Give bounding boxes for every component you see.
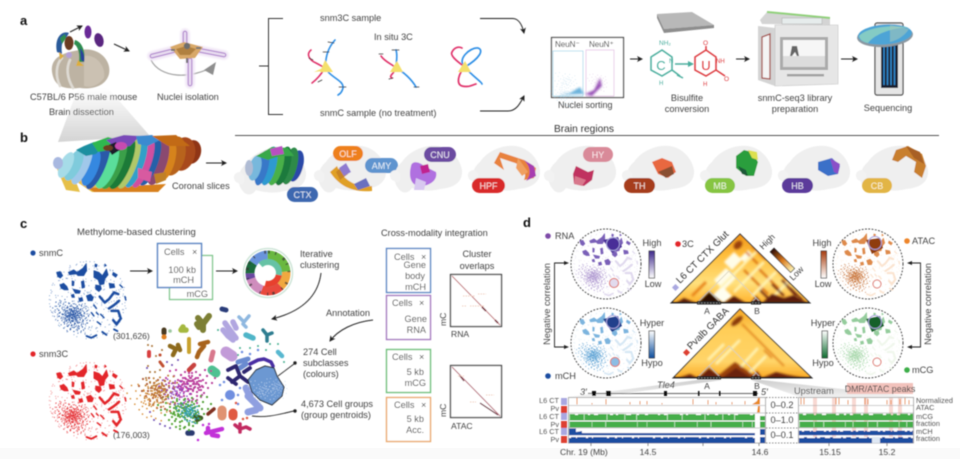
negative correlation left: Negative correlation [542,263,552,345]
arrow annotation [330,320,373,341]
label nuclei sorting: Nuclei sorting [558,100,613,110]
matrix gene body mCH: body [405,271,425,281]
region HY [544,146,616,192]
heatmap Pvalb GABA: B [754,381,760,391]
axis genomic coordinates: 14.6 [752,447,769,457]
axis genomic coordinates: 14.5 [640,447,657,457]
umap snmC [39,251,136,349]
label snm3C sample: snm3C sample [320,13,381,23]
label bisulfite conversion: Bisulfite [671,93,703,103]
count snm3C: (176,003) [113,430,150,440]
track labels: mCG [916,412,933,421]
region HB [778,146,850,193]
gene model Tle4: 3′ [580,387,587,397]
row labels: L6 CT [539,396,560,405]
label brain dissection: Brain dissection [49,107,114,117]
legend ATAC scale [813,238,832,289]
legend mCG scale: Hyper [811,318,835,328]
axis genomic coordinates: 15.15 [819,447,841,457]
diagram: cytosine to uracil: O [724,76,729,83]
matrix gene body mCH: Cells [394,252,415,262]
callout 274 subclasses [278,347,349,379]
row labels [539,396,560,444]
legend 3C: 3C [682,239,694,249]
region MB: MB [713,181,727,191]
matrix gene body mCH: mCH [405,282,426,292]
rule [235,135,939,136]
legend RNA scale: Low [645,279,662,289]
umap mCG [827,302,908,384]
range labels [766,398,798,443]
region HY: HY [592,150,604,160]
genome tracks right [798,398,914,443]
region OLF and AMY: OLF [339,149,357,159]
label iterative clustering: clustering [300,260,339,270]
label nuclei isolation: Nuclei isolation [157,92,219,102]
label library preparation: snmC-seq3 library [758,93,833,103]
label in situ 3C: In situ 3C [374,32,413,42]
callout 4,673 groups [252,399,373,420]
diagram: cytosine to uracil: C [656,58,666,73]
matrix mCG: 5 kb [407,367,424,377]
label brain dissection [30,92,137,117]
matrix gene RNA [386,296,430,340]
legend mCG: mCG [912,365,933,375]
gene model Tle4: Tle4 [657,380,675,390]
matrix stack mCH mCG: mCH [173,275,194,285]
diagram: contact one [309,40,346,95]
region MB [700,146,772,193]
umap snm3C [39,352,136,450]
icon: centrifuge rotor [151,33,224,84]
label coronal slices: Coronal slices [172,181,230,191]
legend RNA: RNA [555,231,575,241]
axis genomic coordinates [560,443,896,457]
image: coronal slices stack [53,134,204,192]
label brain dissection: C57BL/6 P56 male mouse [30,92,137,102]
matrix gene body mCH: Gene [404,260,426,270]
heading brain regions: Brain regions [554,124,614,135]
matrix gene RNA: Gene [405,314,427,324]
chart: coloured atlas umap [127,309,287,440]
panel letter d: d [523,215,531,230]
count snmC: (301,626) [113,331,150,341]
legend mCH scale [640,318,664,368]
label bisulfite conversion: conversion [665,104,709,114]
label bisulfite conversion [665,93,709,114]
legend mCH: mCH [555,371,576,381]
label upstream: Upstream [794,386,834,396]
matrix mCG [386,350,430,392]
panel c: clustering [20,216,502,450]
funnel from contact map to tracks [568,380,914,397]
matrix gene RNA: RNA [407,325,427,335]
legend mCH scale: Hyper [640,318,664,328]
negative correlation right [907,261,933,349]
arrow to regions [206,162,226,164]
matrix mCG: × [419,352,424,362]
matrix stack mCH mCG [158,244,212,300]
chart: clustering wheel [244,248,292,298]
arrow to library prep [736,58,749,60]
panel letter b: b [20,130,28,145]
region HB: HB [791,181,804,191]
range labels: 0–0.2 [770,400,794,410]
negative correlation right: Negative correlation [923,263,933,345]
umap mCH [565,302,646,384]
callout 274 subclasses: 274 Cell [303,347,337,357]
diagram: cytosine to uracil: U [701,58,711,73]
legend RNA scale: High [643,238,661,248]
arrow to bisulfite [630,58,642,60]
arrow bottom to sorting [480,96,524,111]
callout 274 subclasses: subclasses [303,358,349,368]
row labels: L6 CT [539,427,560,436]
label snmC sample: snmC sample (no treatment) [320,108,436,118]
label sequencing: Sequencing [864,103,912,113]
umap RNA [565,223,646,305]
diagram: cytosine to uracil: NH₂ [659,40,671,47]
legend mCH [545,371,576,381]
umap ATAC [827,223,908,305]
matrix accessibility [386,398,430,442]
legend mCG scale [811,318,835,368]
icon: plate [657,12,714,33]
gene model Tle4 [580,380,768,397]
chart: nuclei sorting [551,38,624,106]
diagram: cytosine to uracil: H [703,82,707,88]
legend ATAC: ATAC [912,236,936,246]
region OLF and AMY: AMY [372,161,391,171]
label cluster overlaps: overlaps [460,261,495,271]
heatmap L6 CT [670,229,812,316]
matrix accessibility: Acc. [406,425,424,435]
heatmap Pvalb GABA: A [704,381,710,391]
track labels [916,396,953,443]
panel letter a: a [20,13,28,28]
heatmap L6 CT: L6 CT CTX Glut [674,229,731,286]
chart: mC vs RNA overlap [438,274,502,339]
label annotation: Annotation [326,308,370,318]
matrix stack mCH mCG: Cells [164,247,185,257]
icon: sequencer flow cell [856,23,914,95]
matrix gene RNA: × [419,298,424,308]
legend 3C [675,239,694,249]
heading methylome clustering: Methylome-based clustering [77,227,196,238]
genome tracks left [568,398,766,443]
label library preparation: preparation [772,104,818,114]
label iterative clustering: Iterative [300,249,333,259]
arrow to sequencing [841,58,857,60]
chart: mC vs ATAC overlap: ATAC [451,421,473,431]
panel letter c: c [20,216,27,231]
funnel from brain to slices [58,88,150,142]
legend mCH scale: Hypo [641,358,663,368]
callout 4,673 groups: (group gentroids) [301,410,371,420]
region CNU [390,146,462,192]
diagram: contact loop [452,47,482,87]
matrix accessibility: 5 kb [407,414,424,424]
matrix accessibility: × [421,400,426,410]
matrix gene RNA: Cells [392,298,413,308]
arrow to dissected sections [70,26,82,32]
track labels: fraction [916,419,940,428]
colour bar contact map [757,232,806,282]
matrix accessibility: Cells [394,400,415,410]
diagram: cytosine to uracil: NH [716,59,725,65]
heading cross-modality: Cross-modality integration [381,228,488,238]
matrix mCG: mCG [405,378,426,388]
chart: nuclei sorting: NeuN⁺ [589,40,614,49]
label iterative clustering [300,249,339,270]
panel b: brain regions [20,124,939,202]
heatmap Pvalb GABA: Pvalb GABA [685,306,732,352]
legend RNA scale [643,238,662,289]
range labels: 0–0.1 [770,430,794,440]
range labels: 0–1.0 [770,415,794,425]
gene model Tle4: 5′ [761,387,768,397]
region TH [622,146,694,193]
label library preparation [758,93,833,114]
track labels: fraction [916,434,940,443]
arrow clustering to atlas [272,273,321,319]
row labels: Pv [550,420,559,429]
chart: nuclei sorting: NeuN⁻ [555,40,580,49]
matrix gene body mCH [386,248,430,292]
label cluster overlaps [460,249,495,271]
arrow top to sorting [480,18,524,33]
region HPF: HPF [480,181,498,191]
arrow to matrices [130,270,152,272]
axis genomic coordinates: Chr. 19 (Mb) [560,447,608,457]
diagram: cytosine to uracil [651,40,729,88]
region CTX: CTX [294,190,312,200]
chart: mC vs RNA overlap: RNA [451,329,469,339]
negative correlation left [542,261,569,349]
diagram: cytosine to uracil: H [659,81,663,87]
chart: mC vs ATAC overlap: mC [438,404,448,417]
icon: mouse brain dissection [52,26,109,88]
chart: mC vs ATAC overlap [438,366,502,431]
matrix stack mCH mCG: × [192,247,197,257]
track labels: mCH [916,427,933,436]
row colour keys [561,398,567,443]
diagram: cytosine to uracil: N [669,59,673,65]
matrix gene body mCH: × [421,252,426,262]
colour bar contact map: Low [787,264,806,282]
axis genomic coordinates: 15.2 [879,447,896,457]
icon: liquid handling machine [758,12,838,86]
heatmap L6 CT: A [704,306,710,316]
region CTX [234,145,318,202]
diagram: cytosine to uracil: O [703,40,708,47]
panel d: integrated tracks [523,215,953,457]
heatmap L6 CT: B [754,306,760,316]
track labels: Normalized [916,396,953,405]
matrix stack mCH mCG: 100 kb [168,265,196,275]
region CB: CB [871,181,883,191]
track labels: ATAC [916,403,934,412]
row labels: Pv [550,404,559,413]
callout DMR/ATAC peaks: DMR/ATAC peaks [845,384,916,394]
row labels: L6 CT [539,412,560,421]
chart: mC vs RNA overlap: mC [438,313,448,326]
bracket [259,18,283,114]
legend ATAC scale: High [813,238,831,248]
region HPF [468,146,540,193]
diagram: contact two [379,50,419,87]
heatmap Pvalb GABA [670,306,814,391]
region CB [856,146,928,193]
panel a: experiment workflow [20,12,914,142]
matrix mCG: Cells [392,352,413,362]
arrow to nuclei isolation [114,44,129,51]
legend ATAC scale: Low [815,279,832,289]
region OLF and AMY [314,146,398,192]
legend snmC: snmC [39,248,63,258]
row labels: Pv [550,435,559,444]
arrow to wheel [216,270,237,272]
legend mCG scale: Hypo [812,358,834,368]
region TH: TH [634,181,646,191]
legend snm3C: snm3C [39,349,68,359]
legend RNA [545,231,575,241]
matrix stack mCH mCG: mCG [187,289,208,299]
region CNU: CNU [430,150,450,160]
colour bar contact map: High [757,232,777,251]
label cluster overlaps: Cluster [462,249,492,259]
callout 274 subclasses: (colours) [303,369,339,379]
callout 4,673 groups: 4,673 Cell groups [301,399,373,409]
